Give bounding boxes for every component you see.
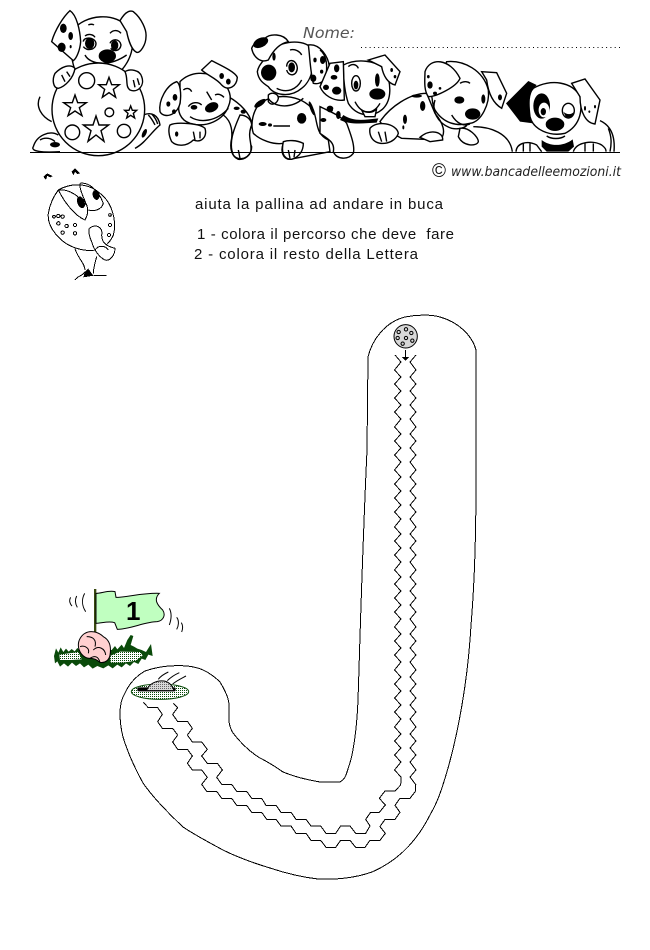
grass <box>54 635 153 669</box>
sleepy puppy <box>160 61 252 159</box>
puppy with ball <box>33 11 160 156</box>
sitting puppy <box>231 35 330 159</box>
golf flag on grass <box>54 589 183 669</box>
zigzag path: vertical right wall <box>410 355 416 785</box>
header illustration: puppies (left part) <box>33 11 330 159</box>
zigzag path: curved inner wall <box>173 703 401 833</box>
header illustration: puppies (right part) <box>320 50 614 158</box>
wind marks right <box>169 608 183 632</box>
letter J outline <box>120 315 476 879</box>
copyright symbol: © <box>432 161 446 182</box>
lying puppy <box>370 61 512 152</box>
instruction heading: aiuta la pallina ad andare in buca <box>195 196 444 213</box>
zigzag path: vertical left wall <box>394 355 401 785</box>
website: www.bancadelleemozioni.it <box>451 165 622 180</box>
owl character <box>43 168 115 280</box>
wind marks left <box>70 593 86 612</box>
step 1: 1 - colora il percorso che deve fare <box>197 226 454 243</box>
flag number: 1 <box>126 596 140 626</box>
step 2: 2 - colora il resto della Lettera <box>194 246 419 263</box>
puppy with spotted ear <box>320 55 400 123</box>
puppy with black ear <box>506 79 614 152</box>
golf hole <box>131 672 189 699</box>
arrow from ball <box>403 350 408 360</box>
zigzag path: curved outer wall <box>143 702 416 847</box>
instructions <box>194 196 454 263</box>
ball <box>52 63 145 156</box>
flag <box>96 591 164 629</box>
copyright and website <box>432 161 622 182</box>
golf ball at start <box>394 325 417 348</box>
grass highlights <box>59 652 143 663</box>
flag pole <box>94 589 96 639</box>
fist <box>78 632 110 663</box>
label: Nome: Nome: <box>303 24 355 42</box>
dotted writing line <box>361 46 621 48</box>
sitting puppy, right side <box>320 50 354 158</box>
ground line <box>30 152 620 154</box>
